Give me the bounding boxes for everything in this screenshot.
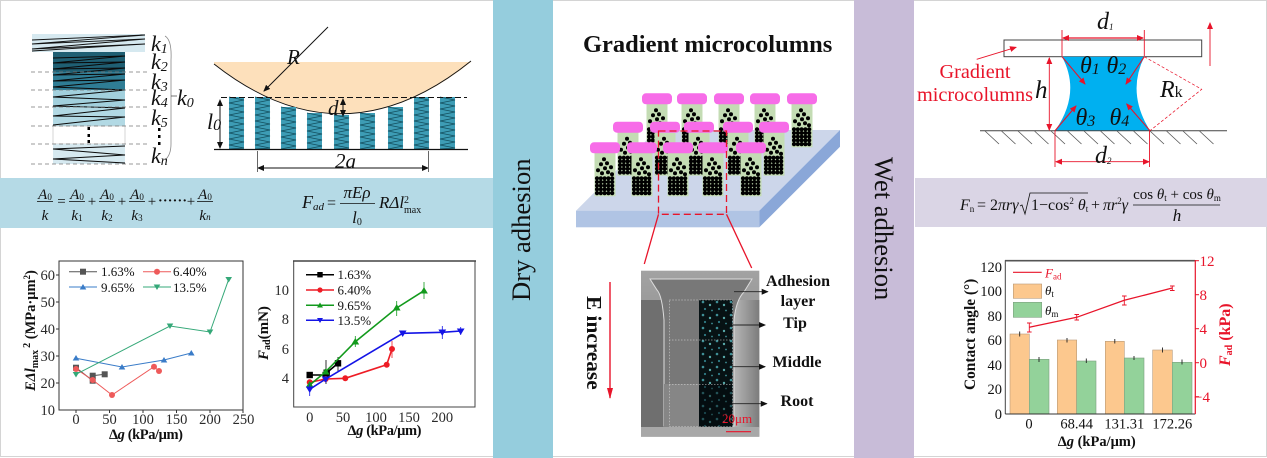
- formula strip: dry adhesion: k: [101, 208, 108, 224]
- formula strip: dry adhesion: n: [206, 212, 211, 222]
- chart: adhesion force against gradient: [256, 261, 476, 439]
- chart: contact angle bars and adhesion line: 40: [988, 358, 1002, 374]
- legend: chart three: θ: [1045, 283, 1051, 298]
- formula strip: wet adhesion: t: [1164, 193, 1167, 203]
- legend: chart two: 13.5%: [338, 313, 371, 328]
- formula strip: dry adhesion: k: [131, 208, 138, 224]
- callouts: column regions: [732, 273, 830, 410]
- formula strip: wet adhesion: θ: [1074, 197, 1086, 214]
- chart: contact angle bars and adhesion line: (kPa): [1217, 303, 1234, 345]
- series: 6.40%: [307, 341, 394, 385]
- diagram: liquid bridge between plate and ground: θ: [1080, 53, 1092, 79]
- chart: adhesion force against gradient: 100: [365, 410, 387, 426]
- formula strip: dry adhesion: 0: [357, 217, 362, 228]
- formula strip: dry adhesion: [0, 178, 493, 228]
- series: 13.5%: [73, 277, 232, 378]
- series: 9.65%: [73, 350, 195, 370]
- chart: contact angle bars and adhesion line: 60: [988, 333, 1002, 349]
- formula strip: dry adhesion: +: [88, 194, 96, 210]
- formula strip: dry adhesion: ad: [313, 201, 324, 213]
- formula strip: wet adhesion: πr: [1103, 197, 1117, 214]
- diagram: liquid bridge between plate and ground: 1: [1092, 61, 1100, 78]
- diagram: liquid bridge between plate and ground: 2: [1118, 61, 1126, 78]
- diagram: liquid bridge between plate and ground: d: [1097, 9, 1109, 35]
- formula strip: dry adhesion: πEρ: [343, 183, 371, 202]
- formula strip: dry adhesion: A: [130, 187, 139, 203]
- diagram: stacked springs: 1: [161, 42, 168, 57]
- formula strip: dry adhesion: =: [57, 194, 66, 210]
- formula strip: dry adhesion: 1: [78, 213, 83, 223]
- diagram: sphere pressing on microcolumns: d: [328, 96, 339, 120]
- formula strip: dry adhesion: 0: [139, 192, 144, 202]
- diagram: liquid bridge between plate and ground: θ: [1106, 53, 1118, 79]
- diagram: liquid bridge between plate and ground: θ: [1076, 105, 1087, 131]
- chart: E delta l squared against gradient: 200: [199, 412, 221, 428]
- chart: E delta l squared against gradient: [22, 261, 254, 443]
- formula strip: dry adhesion: +: [148, 194, 156, 210]
- legend: chart two: [306, 267, 371, 328]
- chart: E delta l squared against gradient: 50: [102, 412, 117, 428]
- diagram: liquid bridge between plate and ground: h: [1035, 77, 1048, 104]
- diagram: microcolumn array on substrate: [576, 93, 840, 268]
- series: 6.40%: [73, 364, 162, 398]
- diagram: liquid bridge between plate and ground: 3: [1086, 113, 1095, 130]
- diagram: sphere pressing on microcolumns: 2a: [335, 149, 356, 173]
- chart: contact angle bars and adhesion line: 0: [995, 407, 1002, 423]
- chart: contact angle bars and adhesion line: 68.44: [1060, 416, 1094, 432]
- image: SEM micrograph of a column: [641, 271, 759, 437]
- chart: contact angle bars and adhesion line: 0: [1025, 416, 1033, 432]
- formula strip: dry adhesion: 0: [47, 192, 52, 202]
- formula strip: dry adhesion: +: [118, 194, 126, 210]
- panel: dry adhesion side bar: Dry adhesion: [506, 158, 536, 301]
- legend: chart three: [1013, 266, 1062, 319]
- formula strip: wet adhesion: 2: [1117, 196, 1122, 206]
- formula strip: dry adhesion: RΔl: [378, 193, 404, 212]
- chart: contact angle bars and adhesion line: 12: [1200, 254, 1214, 270]
- chart: adhesion force against gradient: (mN): [256, 306, 272, 339]
- chart: E delta l squared against gradient: 60: [40, 268, 55, 284]
- chart: contact angle bars and adhesion line: [962, 254, 1235, 450]
- formula strip: wet adhesion: 1−cos: [1031, 197, 1069, 214]
- diagram: liquid bridge between plate and ground: Gradient: [940, 61, 1011, 83]
- chart: contact angle bars and adhesion line: 131.31: [1104, 416, 1144, 432]
- legend: chart three: m: [1051, 309, 1058, 319]
- formula strip: dry adhesion: 3: [138, 213, 143, 223]
- legend: chart two: 1.63%: [338, 267, 371, 282]
- chart: E delta l squared against gradient: 100: [132, 412, 154, 428]
- diagram: stacked springs: 5: [161, 116, 168, 131]
- formula strip: wet adhesion: + cos: [1167, 187, 1203, 203]
- chart: E delta l squared against gradient: 0: [72, 412, 80, 428]
- legend: chart two: 9.65%: [338, 298, 371, 313]
- callouts: column regions: Tip: [783, 315, 807, 332]
- panel: dry adhesion side bar: [493, 0, 553, 458]
- diagram: stacked springs: k: [151, 105, 161, 130]
- chart: E delta l squared against gradient: 250: [233, 412, 254, 428]
- formula strip: dry adhesion: max: [404, 205, 421, 216]
- formula strip: dry adhesion: A: [38, 187, 47, 203]
- chart: adhesion force against gradient: 10: [274, 283, 289, 299]
- chart: E delta l squared against gradient: Δg (kPa/μm): [109, 427, 183, 443]
- chart: E delta l squared against gradient: 2: [22, 343, 33, 348]
- chart: E delta l squared against gradient: (MPa·μm: [23, 279, 39, 343]
- image: SEM micrograph of a column: 20μm: [722, 411, 752, 426]
- callouts: column regions: layer: [781, 293, 815, 310]
- chart: contact angle bars and adhesion line: Δg (kPa/μm): [1058, 434, 1136, 450]
- diagram: stacked springs: k: [151, 69, 161, 94]
- bars: tip contact angle: [1010, 334, 1172, 414]
- diagram: liquid bridge between plate and ground: 4: [1121, 113, 1129, 130]
- diagram: liquid bridge between plate and ground: [917, 9, 1227, 169]
- chart: adhesion force against gradient: 50: [336, 410, 350, 426]
- formula strip: dry adhesion: +: [187, 194, 195, 210]
- chart: E delta l squared against gradient: 40: [40, 322, 55, 338]
- chart: E delta l squared against gradient: max: [30, 350, 41, 368]
- formula strip: dry adhesion: k: [71, 208, 78, 224]
- diagram: liquid bridge between plate and ground: θ: [1110, 105, 1121, 131]
- panel: wet adhesion side bar: [854, 0, 914, 458]
- formula strip: wet adhesion: 2: [1069, 196, 1074, 206]
- chart: E delta l squared against gradient: 30: [40, 349, 55, 365]
- panel: wet adhesion side bar: Wet adhesion: [869, 157, 899, 300]
- formula strip: dry adhesion: A: [198, 187, 207, 203]
- formula strip: wet adhesion: m: [1214, 193, 1221, 203]
- diagram: stacked springs: n: [161, 154, 168, 169]
- diagram: liquid bridge between plate and ground: d: [1095, 143, 1107, 169]
- formula strip: wet adhesion: +: [1091, 197, 1100, 214]
- callouts: column regions: Adhesion: [766, 273, 830, 290]
- formula strip: wet adhesion: t: [1086, 204, 1089, 214]
- chart: adhesion force against gradient: 0: [306, 410, 313, 426]
- formula strip: wet adhesion: h: [1173, 206, 1181, 225]
- chart: contact angle bars and adhesion line: −4: [1194, 390, 1210, 406]
- diagram: stacked springs: [31, 31, 194, 169]
- formula strip: dry adhesion: 2: [404, 195, 409, 206]
- diagram: sphere pressing on microcolumns: 0: [213, 117, 221, 134]
- heading: gradient microcolumns: Gradient microcolumns: [583, 31, 832, 58]
- diagram: stacked springs: 2: [161, 60, 168, 75]
- series: adhesion force line: [1027, 286, 1175, 332]
- formula strip: dry adhesion: ······: [158, 194, 187, 209]
- diagram: stacked springs: k: [151, 31, 161, 56]
- diagram: stacked springs: k: [177, 85, 187, 110]
- chart: contact angle bars and adhesion line: 8: [1200, 288, 1207, 304]
- series: 1.63%: [307, 357, 341, 384]
- legend: chart three: θ: [1045, 303, 1051, 318]
- callouts: column regions: Middle: [773, 354, 821, 371]
- legend: chart three: F: [1045, 266, 1053, 280]
- legend: chart one: 6.40%: [173, 264, 207, 279]
- series: 13.5%: [307, 326, 464, 396]
- formula strip: wet adhesion: n: [970, 204, 975, 214]
- arrow: E increase: [582, 282, 613, 399]
- diagram: liquid bridge between plate and ground: Rk: [1159, 77, 1183, 103]
- formula strip: dry adhesion: k: [42, 208, 49, 224]
- formula strip: dry adhesion: F: [302, 192, 313, 212]
- arrow: E increase: E increase: [582, 296, 606, 390]
- diagram: stacked springs: k: [151, 85, 161, 110]
- chart: E delta l squared against gradient: 2: [22, 274, 32, 279]
- chart: adhesion force against gradient: ad: [262, 339, 273, 350]
- chart: E delta l squared against gradient: 50: [40, 295, 55, 311]
- diagram: sphere pressing on microcolumns: R: [286, 45, 300, 69]
- diagram: stacked springs: 4: [161, 96, 168, 111]
- formula strip: wet adhesion: [915, 178, 1267, 227]
- chart: contact angle bars and adhesion line: 80: [988, 309, 1002, 325]
- diagram: liquid bridge between plate and ground: microcolumns: [917, 84, 1033, 106]
- chart: adhesion force against gradient: 8: [282, 312, 289, 328]
- legend: chart one: 1.63%: [101, 264, 135, 279]
- diagram: sphere pressing on microcolumns: [207, 27, 471, 173]
- legend: chart three: ad: [1053, 272, 1062, 282]
- chart: contact angle bars and adhesion line: 172.26: [1152, 416, 1192, 432]
- diagram: stacked springs: k: [151, 143, 161, 168]
- formula strip: dry adhesion: 0: [109, 192, 114, 202]
- legend: chart one: 13.5%: [173, 280, 207, 295]
- chart: contact angle bars and adhesion line: Contact angle (°): [962, 279, 979, 390]
- diagram: sphere pressing on microcolumns: l: [207, 109, 213, 134]
- chart: E delta l squared against gradient: ): [23, 270, 39, 275]
- formula strip: wet adhesion: = 2πrγ: [977, 197, 1019, 214]
- formula strip: wet adhesion: F: [960, 197, 970, 214]
- formula strip: wet adhesion: γ: [1122, 197, 1129, 214]
- legend: chart two: 6.40%: [338, 282, 371, 298]
- diagram: liquid bridge between plate and ground: 2: [1107, 156, 1112, 166]
- chart: contact angle bars and adhesion line: F: [1217, 355, 1234, 367]
- callouts: column regions: Root: [781, 393, 814, 410]
- chart: contact angle bars and adhesion line: 20: [988, 382, 1002, 398]
- legend: chart three: t: [1051, 289, 1054, 299]
- formula strip: wet adhesion: cos θ: [1133, 187, 1164, 203]
- formula strip: dry adhesion: A: [100, 187, 109, 203]
- chart: adhesion force against gradient: 150: [398, 410, 420, 426]
- formula strip: wet adhesion: θ: [1203, 187, 1214, 203]
- diagram: liquid bridge between plate and ground: 1: [1109, 22, 1114, 32]
- formula strip: dry adhesion: 0: [79, 192, 84, 202]
- chart: E delta l squared against gradient: 20: [40, 376, 55, 392]
- formula strip: dry adhesion: A: [70, 187, 79, 203]
- chart: adhesion force against gradient: Δg (kPa/μm): [348, 423, 422, 439]
- series: 9.65%: [307, 282, 427, 387]
- chart: contact angle bars and adhesion line: 120: [980, 260, 1002, 276]
- chart: E delta l squared against gradient: EΔl: [23, 368, 39, 392]
- formula strip: dry adhesion: =: [327, 195, 336, 212]
- chart: E delta l squared against gradient: 150: [166, 412, 187, 428]
- formula strip: dry adhesion: k: [199, 208, 206, 224]
- diagram: stacked springs: 3: [160, 80, 168, 95]
- diagram: stacked springs: 0: [187, 96, 194, 111]
- chart: E delta l squared against gradient: 10: [40, 403, 55, 419]
- chart: contact angle bars and adhesion line: 100: [980, 284, 1002, 300]
- diagram: stacked springs: k: [151, 49, 161, 74]
- chart: adhesion force against gradient: F: [256, 350, 272, 361]
- series: 1.63%: [73, 365, 108, 384]
- chart: adhesion force against gradient: 4: [282, 371, 290, 387]
- chart: contact angle bars and adhesion line: 4: [1200, 322, 1208, 338]
- legend: chart one: [69, 264, 207, 295]
- bars: middle contact angle: [1029, 358, 1192, 414]
- legend: chart one: 9.65%: [101, 280, 135, 295]
- formula strip: dry adhesion: 2: [108, 213, 113, 223]
- formula strip: dry adhesion: 0: [207, 192, 212, 202]
- chart: adhesion force against gradient: 200: [431, 410, 453, 426]
- formula strip: dry adhesion: l: [352, 208, 357, 227]
- chart: contact angle bars and adhesion line: 0: [1200, 356, 1207, 372]
- chart: contact angle bars and adhesion line: ad: [1224, 344, 1235, 355]
- chart: adhesion force against gradient: 6: [282, 342, 289, 358]
